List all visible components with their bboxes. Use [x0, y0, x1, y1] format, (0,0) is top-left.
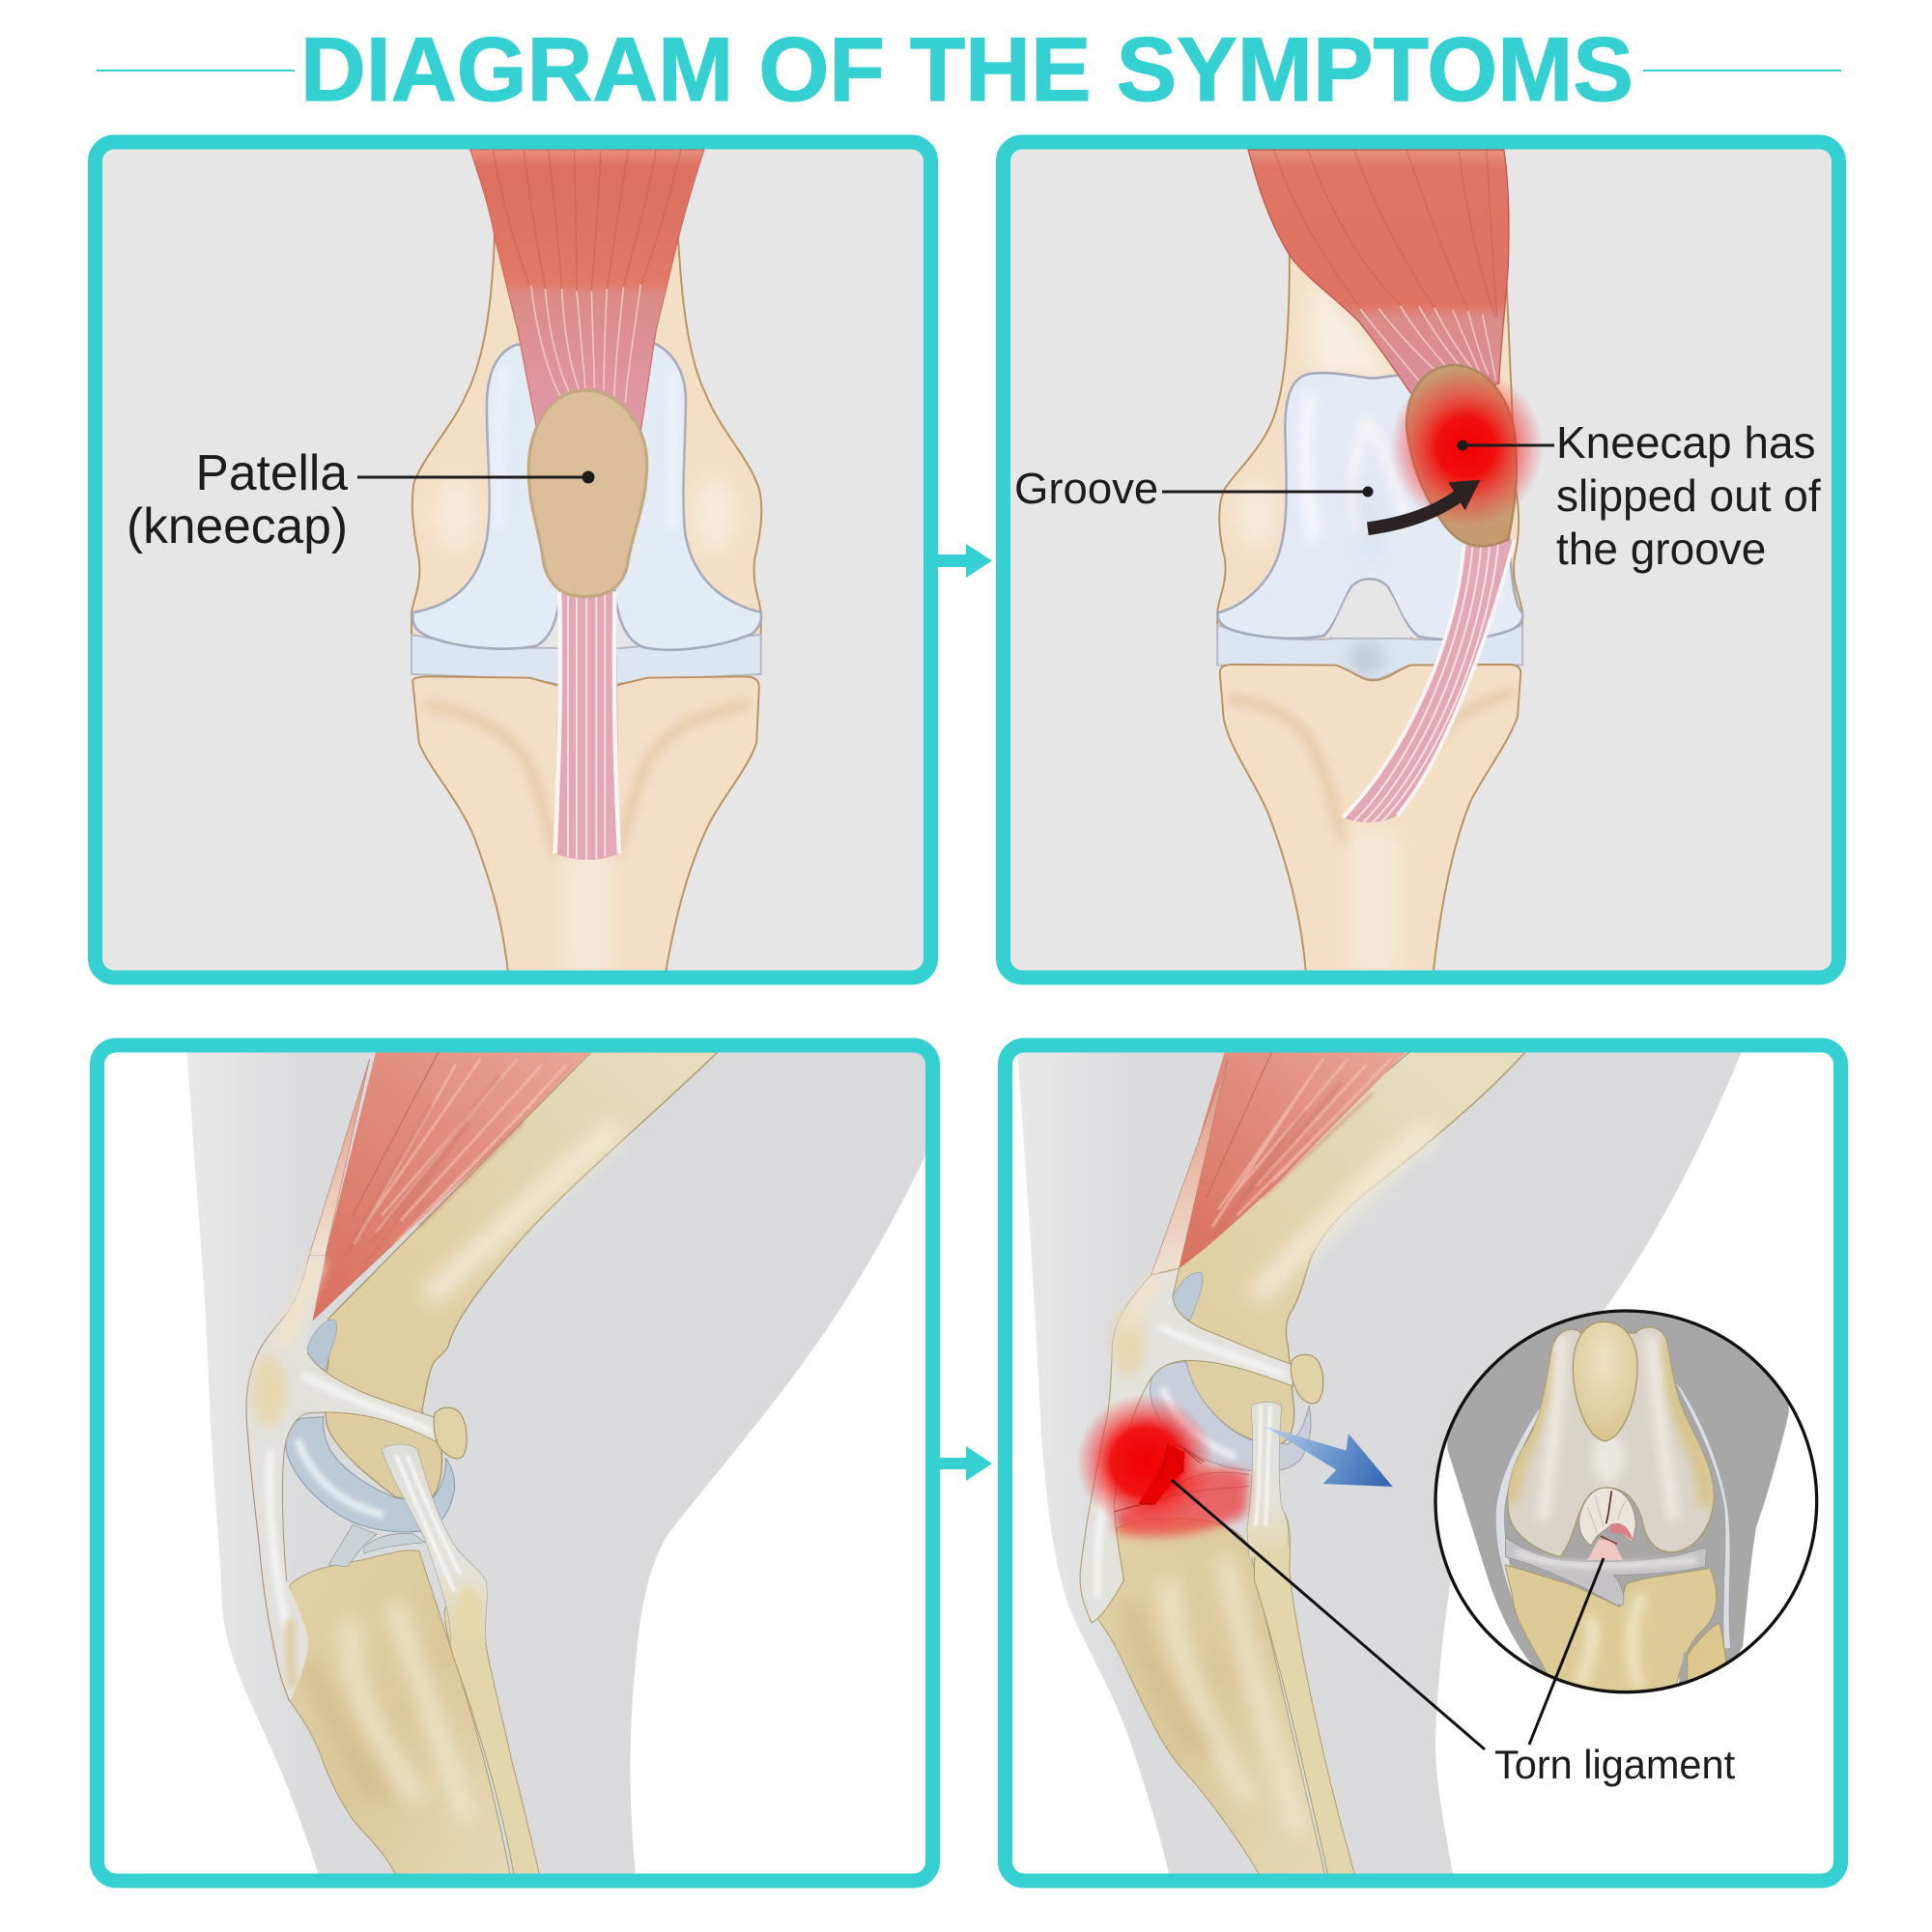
- reddened meniscus band: [1114, 1468, 1249, 1537]
- patellar tendon: [554, 591, 619, 860]
- leg silhouette: [1017, 1047, 1744, 1881]
- inset torn cruciate: [1579, 1488, 1635, 1560]
- torn ligament: [1114, 1444, 1249, 1512]
- femoral cartilage: [412, 343, 761, 650]
- displaced patella: [1406, 365, 1517, 546]
- patella and tendon: [1080, 1268, 1294, 1623]
- quadriceps muscle and tendon: [470, 150, 704, 432]
- label: torn ligament: Torn ligament: [1494, 1742, 1736, 1787]
- inset femur: [1508, 1327, 1714, 1557]
- inset meniscus: [1505, 1538, 1707, 1605]
- label: kneecap has slipped: Kneecap has: [1556, 417, 1816, 468]
- arrow: bottom row: [940, 1446, 992, 1481]
- arrow: top row: [938, 544, 992, 578]
- label: patella: Patella: [196, 444, 348, 500]
- tibia: [412, 676, 759, 974]
- upper tendon strip: [309, 1059, 370, 1256]
- inset notch shadow: [1562, 1536, 1674, 1565]
- collateral ligament: [1247, 1402, 1289, 1558]
- femur: [1169, 1052, 1525, 1444]
- patella: [528, 390, 647, 597]
- femur: [1216, 254, 1523, 641]
- tendon knob: [434, 1407, 467, 1459]
- quadriceps muscle: [1179, 1047, 1410, 1268]
- pain glow: [1076, 1394, 1215, 1529]
- inset tibia: [1505, 1565, 1717, 1693]
- inset patella: [1573, 1321, 1637, 1441]
- label: kneecap has slipped: the groove: [1556, 524, 1766, 574]
- panel: normal kneecap front view: [95, 142, 931, 978]
- inset circle: [1435, 1294, 1817, 1693]
- fibula: [1254, 1514, 1356, 1881]
- label: groove: Groove: [1014, 464, 1158, 513]
- tibia: [1086, 1519, 1326, 1881]
- panel: normal ligaments side view: [97, 1045, 933, 1881]
- cruciate ligaments: [328, 1524, 425, 1567]
- title: DIAGRAM OF THE SYMPTOMS: [300, 18, 1634, 120]
- collateral ligament: [382, 1444, 487, 1642]
- leg silhouette: [186, 1047, 930, 1881]
- meniscus band: [1217, 625, 1522, 679]
- intercondylar notch: [1325, 581, 1417, 638]
- panel: torn ligament side view: [1005, 1045, 1841, 1881]
- suprapatellar bursa: [307, 1320, 337, 1370]
- femur: [411, 235, 763, 641]
- tibia: [288, 1550, 511, 1881]
- label: kneecap has slipped: [1457, 417, 1821, 574]
- panel: kneecap slipped out of groove: [1003, 142, 1839, 978]
- label: patella: (kneecap): [127, 497, 348, 554]
- inset side ligaments: [1495, 1381, 1731, 1649]
- torn ligament leader lines: [1172, 1480, 1604, 1749]
- fibula: [444, 1606, 540, 1874]
- suprapatellar bursa: [1172, 1272, 1203, 1321]
- label: patella: [127, 444, 595, 554]
- displaced quadriceps muscle: [1248, 150, 1509, 412]
- movement arrow: [1368, 480, 1481, 528]
- label: kneecap has slipped: slipped out of: [1556, 470, 1821, 521]
- inset background leg: [1447, 1294, 1789, 1678]
- upper tendon strip: [1151, 1059, 1228, 1275]
- quadriceps muscle: [312, 1047, 596, 1321]
- cartilage crescent: [1151, 1362, 1311, 1471]
- trochlear groove cartilage: [1218, 373, 1522, 639]
- blue displacement arrow: [1264, 1427, 1393, 1487]
- femur: [325, 1052, 718, 1500]
- tibial meniscus band: [412, 635, 761, 684]
- tendon knob: [1291, 1354, 1323, 1404]
- patella and quadriceps tendon: [246, 1256, 441, 1702]
- pain glow: [1389, 368, 1544, 526]
- label: groove: [1014, 464, 1374, 513]
- displaced patellar tendon: [1343, 539, 1515, 822]
- tibia: [1220, 665, 1520, 974]
- cartilage crescent: [286, 1417, 455, 1532]
